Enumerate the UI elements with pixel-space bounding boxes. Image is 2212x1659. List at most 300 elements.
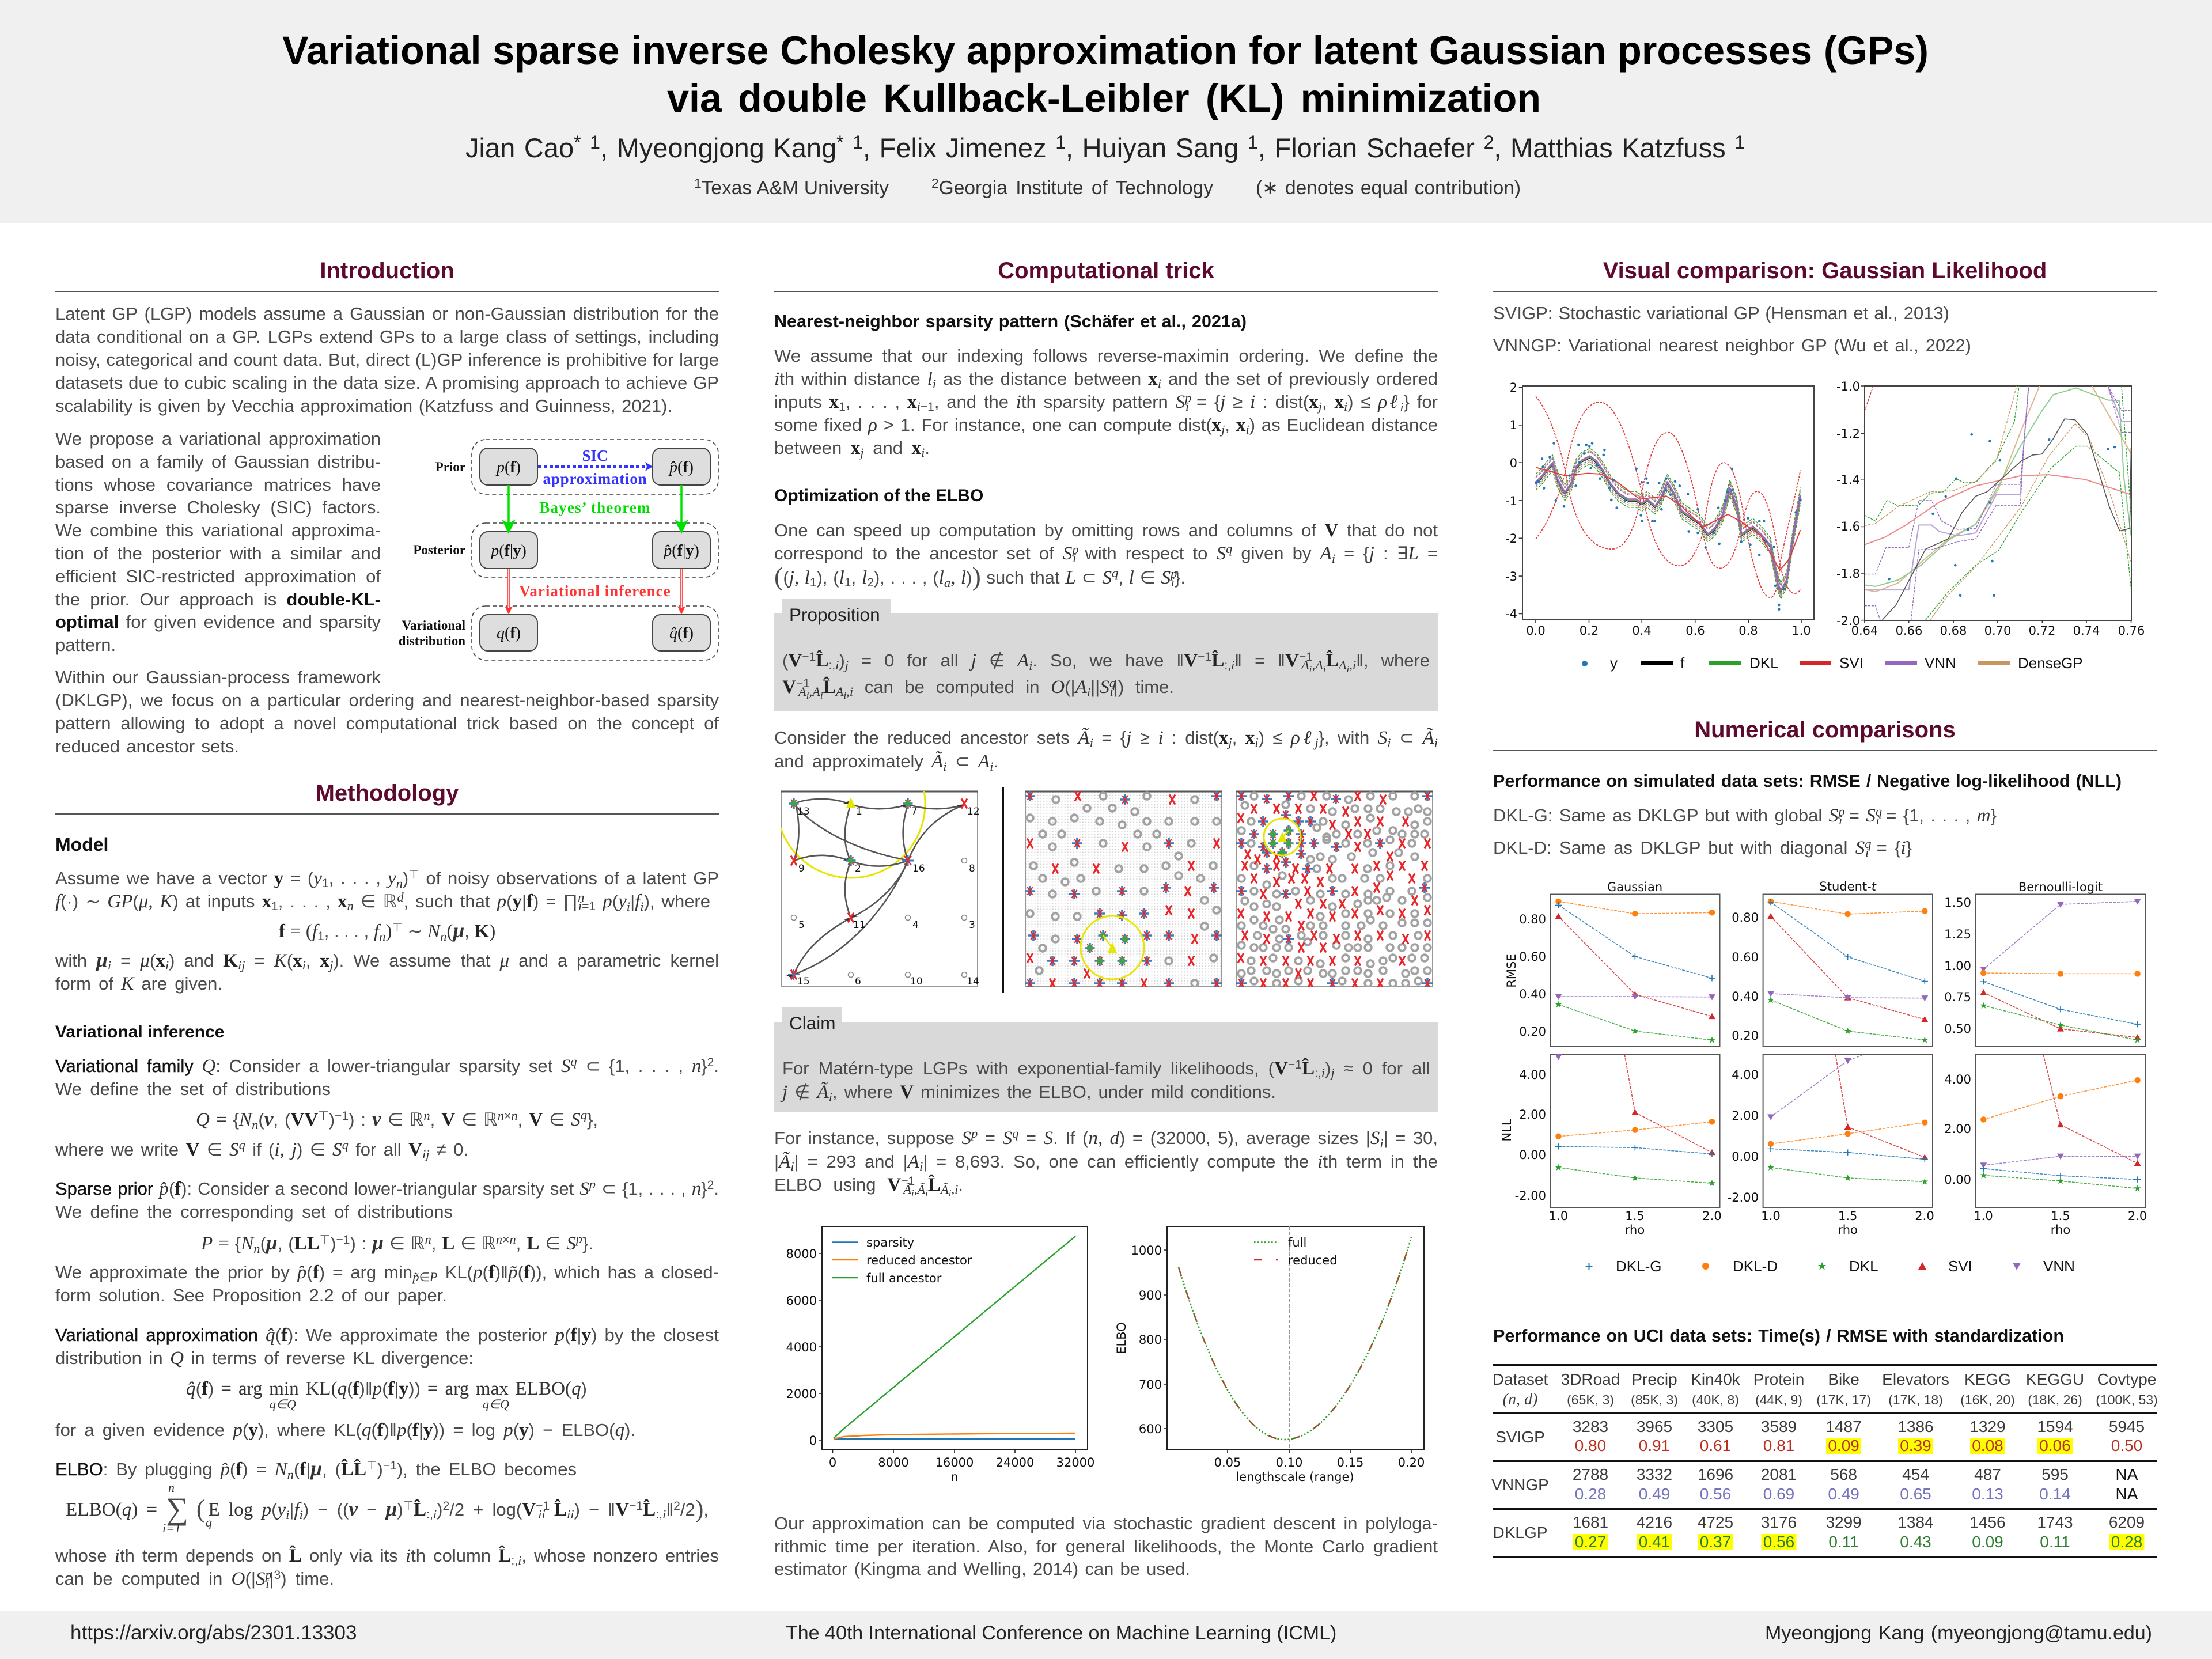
panel: visual comparison — [1493, 258, 2157, 672]
equation: double KL: q∈Q — [483, 1397, 509, 1411]
chart: Gaussian RMSE — [1505, 880, 1720, 1047]
line chart: zoomed domain: 0.70 — [1984, 624, 2011, 638]
line chart: ELBO vs lengthscale: 900 — [1139, 1289, 1162, 1302]
table: time and RMSE per dataset: 2081 — [1761, 1465, 1797, 1483]
header band — [0, 0, 2212, 223]
line chart: ELBO vs lengthscale: 800 — [1139, 1333, 1162, 1347]
subheading: model: Model — [55, 834, 108, 855]
legend: numerical comparisons — [1585, 1257, 2075, 1275]
graph: reverse maximin ordering: 13 — [797, 806, 810, 817]
chart: Bernoulli-logit RMSE — [1944, 880, 2145, 1047]
table: time and RMSE per dataset: NA — [2116, 1465, 2138, 1483]
text block: mean and kernel: with μi = μ(xi) and Kij = K(xi, xj). We assume that μ and a parametric kernel — [55, 948, 719, 972]
legend: visual comparison: VNN — [1925, 654, 1956, 672]
line chart: full domain: -2 — [1505, 532, 1517, 546]
table: time and RMSE per dataset: 1594 — [2037, 1418, 2073, 1435]
line chart: zoomed domain: -2.0 — [1836, 614, 1860, 628]
panel: methodology — [55, 781, 719, 1590]
text block: sparsity pattern: inputs x1, . . . , xi−1, and the ith sparsity pattern Spi = {j ≥ i : dist(xj, xi) ≤ ρℓi} for — [774, 391, 1438, 414]
table: time and RMSE per dataset: 0.49 — [1639, 1485, 1670, 1503]
text block: sparse prior: Sparse prior p̂(f): Consider a second lower-triangular sparsity set Sp ⊂ {1, . . . , n}2. — [55, 1177, 719, 1199]
text block: example sizes: |Ãi| = 293 and |Ai| = 8,693. So, one can efficiently compute the ith term in the — [774, 1151, 1438, 1173]
table: time and RMSE per dataset: 3305 — [1698, 1418, 1733, 1435]
table: time and RMSE per dataset: (17K, 18) — [1888, 1392, 1943, 1407]
line chart: full domain: 0.4 — [1632, 624, 1652, 638]
equation: ELBO sum: q — [206, 1515, 212, 1529]
chart: Bernoulli-logit NLL: 1.0 — [1974, 1209, 1993, 1223]
heading: computational trick — [774, 256, 1438, 292]
line chart: ELBO vs lengthscale: 0.20 — [1398, 1456, 1425, 1469]
text block: evidence relation: for a given evidence p(y), where KL(q(f)‖p(f|y)) = log p(y) − ELBO(q). — [55, 1419, 635, 1441]
text block: complexity: can be computed in O(|Spi|3) time. — [55, 1567, 334, 1590]
graph: reverse maximin ordering: 4 — [912, 919, 919, 931]
line chart: set sizes vs n: 0 — [829, 1456, 836, 1469]
text block: reduced ancestor sets: and approximately Ãi ⊂ Ai. — [774, 751, 998, 774]
chart: Gaussian NLL: 2.00 — [1519, 1108, 1546, 1122]
diagram: prior, posterior, variational distribution: p(f|y) — [490, 542, 527, 560]
subheading: sparsity pattern: Nearest-neighbor sparsity pattern (Schäfer et al., 2021a) — [774, 312, 1247, 331]
table: time and RMSE per dataset: 3589 — [1761, 1418, 1797, 1435]
heading: computational trick: Computational trick — [998, 258, 1214, 283]
graph: reverse maximin ordering: 7 — [911, 806, 918, 817]
line chart: ELBO vs lengthscale: 700 — [1139, 1378, 1162, 1392]
text block: variational family: We define the set of distributions — [55, 1079, 331, 1099]
table: time and RMSE per dataset: 568 — [1830, 1465, 1857, 1483]
line chart: ELBO vs lengthscale: full — [1288, 1236, 1306, 1249]
heading: visual comparison: Visual comparison: Gaussian Likelihood — [1603, 258, 2047, 283]
equation: double KL: q∈Q — [270, 1397, 296, 1411]
heading: visual comparison — [1493, 256, 2157, 292]
line chart: full domain: 0.6 — [1685, 624, 1705, 638]
text block: ELBO intro: ELBO: By plugging p̂(f) = Nn(f|μ, (L̂L̂⊤)−1), the ELBO becomes — [55, 1457, 577, 1482]
legend: numerical comparisons: DKL — [1849, 1257, 1878, 1275]
table: time and RMSE per dataset: 0.39 — [1900, 1437, 1931, 1455]
equation: double KL: q̂(f) = arg min KL(q(f)‖p(f|y)) = arg max ELBO(q) — [186, 1378, 587, 1399]
table: time and RMSE per dataset: (17K, 17) — [1816, 1392, 1871, 1407]
table: time and RMSE per dataset: 3283 — [1573, 1418, 1608, 1435]
table: time and RMSE per dataset: 0.11 — [2040, 1533, 2070, 1551]
table: time and RMSE per dataset: Protein — [1753, 1370, 1804, 1388]
table: time and RMSE per dataset: 0.11 — [1828, 1533, 1859, 1551]
line chart: set sizes vs n: n — [950, 1470, 959, 1484]
text block: complexity — [55, 1544, 719, 1590]
line chart: set sizes vs n: 8000 — [786, 1247, 817, 1261]
text block: model description: f(·) ∼ GP(μ, K) at inputs x1, . . . , xn ∈ ℝd, such that p(y|f) = ∏ni=1 p(yi|fi), where — [55, 890, 710, 914]
text block: reduced ancestor sets — [774, 726, 1438, 773]
line chart: full domain: 0.8 — [1738, 624, 1758, 638]
chart: Student-t NLL: 1.0 — [1761, 1209, 1781, 1223]
table: time and RMSE per dataset: DKLGP — [1493, 1524, 1547, 1541]
chart: Student-t NLL: 2.00 — [1732, 1109, 1759, 1123]
text block: optimization: ((j, l1), (l1, l2), . . . , (la, l)) such that L ⊂ Sq, l ∈ Spi}. — [774, 562, 1185, 591]
table: time and RMSE per dataset: 0.13 — [1972, 1485, 2003, 1503]
text block: model description: Assume we have a vector y = (y1, . . . , yn)⊤ of noisy observations of a latent GP — [55, 868, 719, 891]
line chart: set sizes vs n: reduced ancestor — [866, 1253, 972, 1267]
graph: reverse maximin ordering: 11 — [853, 919, 866, 931]
graph: reverse maximin ordering: 6 — [855, 976, 861, 987]
table: time and RMSE per dataset: 0.09 — [1972, 1533, 2003, 1551]
table: time and RMSE per dataset: 3176 — [1761, 1513, 1797, 1531]
line chart: zoomed domain: -1.4 — [1836, 473, 1860, 487]
line chart: full domain: 1 — [1510, 418, 1517, 432]
table: time and RMSE per dataset: 1696 — [1698, 1465, 1733, 1483]
graph: reverse maximin ordering: 16 — [912, 863, 925, 874]
line chart: ELBO vs lengthscale — [1115, 1226, 1425, 1484]
line chart: set sizes vs n: 4000 — [786, 1340, 817, 1354]
line chart: zoomed domain: -1.6 — [1836, 520, 1860, 533]
text block: optimization: correspond to the ancestor set of Spi with respect to Sq given by Ai = {j : ∃L = — [774, 541, 1438, 566]
table: time and RMSE per dataset: (40K, 8) — [1692, 1392, 1739, 1407]
diagram: prior, posterior, variational distribution: approximation — [543, 470, 647, 487]
table: time and RMSE per dataset: 3332 — [1637, 1465, 1672, 1483]
table: time and RMSE per dataset: KEGG — [1964, 1370, 2011, 1388]
text block: sparse prior: We define the corresponding set of distributions — [55, 1202, 453, 1222]
chart: Gaussian RMSE: 0.20 — [1519, 1025, 1546, 1039]
equation: ELBO sum: i=1 — [162, 1521, 181, 1535]
graph: reverse maximin ordering: 1 — [856, 806, 862, 817]
table: time and RMSE per dataset — [1493, 1359, 2157, 1561]
diagram: prior, posterior, variational distribution: q(f) — [497, 624, 521, 642]
text: VNNGP definition: VNNGP: Variational nearest neighbor GP (Wu et al., 2022) — [1493, 335, 1971, 355]
line chart: full domain: -4 — [1505, 607, 1517, 621]
table: time and RMSE per dataset: 0.28 — [1575, 1485, 1606, 1503]
chart: Gaussian NLL — [1500, 1054, 1722, 1237]
line chart: set sizes vs n: 8000 — [878, 1456, 909, 1469]
equation: ELBO sum: n — [168, 1480, 175, 1495]
table: time and RMSE per dataset: 0.28 — [2111, 1533, 2142, 1551]
chart: Gaussian RMSE: RMSE — [1505, 953, 1518, 988]
chart: Student-t NLL — [1728, 1054, 1934, 1237]
authors: Jian Cao* 1, Myeongjong Kang* 1, Felix Jimenez 1, Huiyan Sang 1, Florian Schaefer 2, Matthias Katzfuss 1 — [465, 132, 1745, 163]
footer band — [0, 1611, 2212, 1659]
graph: reverse maximin ordering: 15 — [797, 976, 810, 987]
table: time and RMSE per dataset: 487 — [1974, 1465, 2001, 1483]
text block: intro paragraph 1: Latent GP (LGP) models assume a Gaussian or non-Gaussian distribution for the — [55, 304, 719, 324]
proposition tab: Proposition — [789, 604, 880, 625]
chart: Bernoulli-logit NLL: 1.5 — [2051, 1209, 2070, 1223]
equation: double KL — [186, 1377, 587, 1415]
table: time and RMSE per dataset: 0.09 — [1828, 1437, 1859, 1455]
equation: ELBO sum: ELBO(q) = ∑ (E log p(yi|fi) − ((ν − μ)⊤L̂:,i)2/2 + log(V−1ii L̂ii) − ‖V−1L̂:,i‖2/2), — [66, 1491, 709, 1526]
table: time and RMSE per dataset: Covtype — [2097, 1370, 2156, 1388]
affiliations — [694, 176, 1521, 199]
equation: family Q: Q = {Nn(ν, (VV⊤)−1) : ν ∈ ℝn, V ∈ ℝn×n, V ∈ Sq}, — [196, 1107, 598, 1132]
line chart: zoomed domain: -1.0 — [1836, 380, 1860, 393]
line chart: set sizes vs n: sparsity — [866, 1236, 914, 1249]
table: time and RMSE per dataset: 1487 — [1825, 1418, 1862, 1435]
table: time and RMSE per dataset: VNNGP — [1491, 1476, 1549, 1494]
table: time and RMSE per dataset: 0.65 — [1900, 1485, 1931, 1503]
table: time and RMSE per dataset: Elevators — [1882, 1370, 1949, 1388]
text block: intro paragraph 3 — [55, 667, 719, 756]
line chart: ELBO vs lengthscale: 0.15 — [1337, 1456, 1363, 1469]
graph: reverse maximin ordering: 9 — [798, 863, 805, 874]
table: time and RMSE per dataset: 0.14 — [2039, 1485, 2071, 1503]
heading: numerical comparisons — [1493, 715, 2157, 751]
text block: example sizes: For instance, suppose Sp = Sq = S. If (n, d) = (32000, 5), average sizes |Si| = 30, — [774, 1126, 1438, 1150]
table: time and RMSE per dataset: 0.56 — [1700, 1485, 1731, 1503]
table: time and RMSE per dataset: (16K, 20) — [1960, 1392, 2015, 1407]
figure: ordering and neighbor sets — [781, 787, 1433, 993]
text block: stochastic gradient: estimator (Kingma and Welling, 2014) can be used. — [774, 1559, 1190, 1579]
chart: Student-t NLL: 4.00 — [1732, 1068, 1759, 1082]
text block: reduced ancestor sets: Consider the reduced ancestor sets Ãi = {j ≥ i : dist(xj, xi) ≤ ρℓj}, with Si ⊂ Ãi — [774, 727, 1438, 750]
line chart: ELBO vs lengthscale: 1000 — [1131, 1244, 1162, 1257]
text block: sparsity pattern: some fixed ρ > 1. For instance, one can compute dist(xj, xi) as Euclidean distance — [774, 414, 1438, 437]
affiliations: 2Georgia Institute of Technology — [931, 176, 1213, 199]
text block: sparsity pattern: ith within distance li as the distance between xi and the set of previously ordered — [774, 368, 1438, 391]
line chart: zoomed domain: -1.8 — [1836, 567, 1860, 581]
subheading: UCI data sets: Performance on UCI data sets: Time(s) / RMSE with standardization — [1493, 1326, 2064, 1346]
heading: methodology: Methodology — [316, 781, 459, 806]
affiliations: 1Texas A&M University — [694, 176, 889, 199]
table: time and RMSE per dataset: (85K, 3) — [1631, 1392, 1678, 1407]
legend: visual comparison: f — [1680, 654, 1685, 672]
text block: intro paragraph 2: tion of the posterior with a similar and — [55, 543, 381, 563]
line chart: ELBO vs lengthscale: 0.10 — [1276, 1456, 1302, 1469]
line chart: zoomed domain: 0.68 — [1940, 624, 1967, 638]
text block: intro paragraph 2: We propose a variational approximation — [55, 429, 381, 449]
chart: Bernoulli-logit NLL: 2.0 — [2128, 1209, 2147, 1223]
table: time and RMSE per dataset: 0.41 — [1639, 1533, 1670, 1551]
table: time and RMSE per dataset: 5945 — [2109, 1418, 2145, 1435]
text block: variational family — [55, 1054, 719, 1099]
text block: intro paragraph 2: We combine this variational approxima- — [55, 520, 381, 540]
graph: reverse maximin ordering: 10 — [910, 976, 923, 987]
table: time and RMSE per dataset: (n, d) — [1503, 1391, 1537, 1408]
panel: numerical comparisons — [1493, 709, 2157, 1285]
scatter: dense neighbor set — [1236, 791, 1433, 987]
line chart: set sizes vs n: 6000 — [786, 1294, 817, 1308]
chart: Bernoulli-logit RMSE: 1.00 — [1944, 959, 1971, 973]
text block: intro paragraph 2 — [55, 429, 381, 655]
text block: prior approximation: We approximate the prior by p̂(f) = arg minp̃∈P KL(p(f)‖p̃(f)), which has a closed- — [55, 1262, 719, 1284]
diagram: prior, posterior, variational distribution: Prior — [435, 460, 465, 474]
diagram: prior, posterior, variational distribution: p̂(f|y) — [662, 542, 699, 560]
table: time and RMSE per dataset: 1456 — [1969, 1513, 2006, 1531]
subheading: variational inference: Variational inference — [55, 1022, 224, 1041]
chart: Gaussian RMSE: 0.40 — [1519, 987, 1546, 1001]
panel: introduction — [55, 258, 719, 756]
legend: visual comparison: DKL — [1749, 654, 1779, 672]
chart: Bernoulli-logit NLL: rho — [2051, 1223, 2070, 1237]
text block: intro paragraph 3: pattern allowing to adopt a novel computational trick based on the concept of — [55, 713, 719, 733]
line chart: ELBO vs lengthscale: lengthscale (range) — [1236, 1470, 1354, 1484]
table: time and RMSE per dataset: 454 — [1902, 1465, 1929, 1483]
text block: mean and kernel — [55, 948, 719, 994]
diagram: prior, posterior, variational distribution: distribution — [399, 634, 465, 648]
chart: Student-t RMSE — [1732, 880, 1933, 1047]
chart: Gaussian NLL: 1.5 — [1625, 1209, 1645, 1223]
heading: introduction — [55, 256, 719, 292]
table: time and RMSE per dataset: (18K, 26) — [2028, 1392, 2082, 1407]
chart: Bernoulli-logit RMSE: 0.75 — [1944, 990, 1971, 1004]
table: time and RMSE per dataset: 0.50 — [2111, 1437, 2142, 1455]
chart: Gaussian NLL: 4.00 — [1519, 1068, 1546, 1082]
graph: reverse maximin ordering: 8 — [969, 863, 975, 874]
text block: sparsity pattern: We assume that our indexing follows reverse-maximin ordering. We define the — [774, 346, 1438, 366]
line chart: full domain: 0 — [1510, 456, 1517, 470]
chart: Gaussian NLL: rho — [1625, 1223, 1645, 1237]
claim box — [774, 1022, 1438, 1112]
panel: UCI performance table — [1493, 1319, 2157, 1561]
text: SVIGP definition: SVIGP: Stochastic variational GP (Hensman et al., 2013) — [1493, 303, 1949, 323]
diagram: prior, posterior, variational distribution: Posterior — [413, 543, 465, 557]
text block: stochastic gradient: rithmic time per iteration. Also, for general likelihoods, the Monte Carlo gradient — [774, 1536, 1438, 1556]
chart: Bernoulli-logit RMSE: Bernoulli-logit — [2018, 880, 2103, 894]
title: Variational sparse inverse Cholesky approximation for latent Gaussian processes (GPs) — [282, 29, 1929, 73]
line chart: ELBO vs lengthscale: ELBO — [1115, 1322, 1128, 1354]
line chart: set sizes vs n: 24000 — [996, 1456, 1034, 1469]
chart: Bernoulli-logit NLL: 4.00 — [1944, 1073, 1971, 1086]
table: time and RMSE per dataset: 1743 — [2037, 1513, 2073, 1531]
chart: Student-t NLL: -2.00 — [1728, 1191, 1759, 1205]
panel: computational trick — [774, 258, 1438, 1579]
table: time and RMSE per dataset: KEGGU — [2026, 1370, 2084, 1388]
text block: intro paragraph 2: tions whose covariance matrices have — [55, 475, 381, 495]
table: time and RMSE per dataset: 0.69 — [1763, 1485, 1794, 1503]
chart: Bernoulli-logit RMSE: 0.50 — [1944, 1022, 1971, 1036]
table: time and RMSE per dataset: 595 — [2041, 1465, 2069, 1483]
graph: reverse maximin ordering: 5 — [798, 919, 805, 931]
line chart: zoomed domain: 0.66 — [1896, 624, 1922, 638]
table: time and RMSE per dataset: 2788 — [1573, 1465, 1608, 1483]
proposition tab — [782, 599, 891, 622]
line chart: full domain — [1505, 381, 1814, 638]
text block: stochastic gradient — [774, 1512, 1438, 1581]
graph: reverse maximin ordering: 14 — [967, 976, 979, 987]
text block: optimization: One can speed up computation by omitting rows and columns of V that do not — [774, 520, 1438, 541]
table: time and RMSE per dataset: 0.49 — [1828, 1485, 1859, 1503]
diagram: prior, posterior, variational distribution: p(f) — [495, 459, 521, 476]
table: time and RMSE per dataset: 0.56 — [1763, 1533, 1794, 1551]
text block: example sizes: ELBO using V−1Ãi,ÃiL̂Ãi,i. — [774, 1174, 963, 1199]
table: time and RMSE per dataset: 0.37 — [1700, 1533, 1731, 1551]
line chart: set sizes vs n: 32000 — [1056, 1456, 1094, 1469]
chart: Gaussian NLL: NLL — [1500, 1119, 1514, 1142]
heading: methodology — [55, 779, 719, 815]
footer: paper link: https://arxiv.org/abs/2301.13303 — [70, 1622, 357, 1644]
line chart: set sizes vs n — [786, 1226, 1094, 1484]
diagram: prior, posterior, variational distribution: Bayes’ theorem — [539, 499, 651, 516]
line chart: set sizes vs n: 2000 — [786, 1387, 817, 1401]
heading: introduction: Introduction — [320, 258, 454, 283]
table: time and RMSE per dataset: (65K, 3) — [1567, 1392, 1614, 1407]
text block: intro paragraph 3: (DKLGP), we focus on a particular ordering and nearest-neighbor-based sparsity — [55, 690, 719, 710]
heading: numerical comparisons: Numerical comparisons — [1694, 717, 1956, 743]
text block: sparse prior — [55, 1177, 719, 1222]
table: time and RMSE per dataset: SVIGP — [1495, 1428, 1545, 1446]
legend: visual comparison — [1582, 654, 2083, 672]
text block: intro paragraph 2: optimal for given evidence and sparsity — [55, 612, 381, 632]
text block: intro paragraph 2: sparse inverse Cholesky (SIC) factors. — [55, 497, 381, 517]
subheading: optimization: Optimization of the ELBO — [774, 486, 983, 505]
proposition text: (V−1L̂:,i)j = 0 for all j ∉ Ai. So, we have ‖V−1L̂:,i‖ = ‖V−1Ai,AiL̂Ai,i‖, where — [782, 650, 1430, 675]
chart: Gaussian NLL: 2.0 — [1702, 1209, 1722, 1223]
footer: conference: The 40th International Conference on Machine Learning (ICML) — [786, 1622, 1336, 1644]
table: time and RMSE per dataset: 0.06 — [2039, 1437, 2071, 1455]
chart: Student-t NLL: 2.0 — [1915, 1209, 1934, 1223]
charts: ancestor size and ELBO — [789, 1215, 1440, 1492]
legend: visual comparison: y — [1610, 654, 1618, 672]
table: time and RMSE per dataset: 6209 — [2109, 1513, 2145, 1531]
diagram: prior, posterior, variational distribution: q̂(f) — [669, 624, 694, 642]
chart: Gaussian NLL: -2.00 — [1515, 1189, 1546, 1203]
line chart: full domain: 1.0 — [1791, 624, 1811, 638]
chart: Student-t RMSE: 0.20 — [1732, 1029, 1759, 1043]
line chart: set sizes vs n: 0 — [809, 1434, 817, 1448]
claim tab: Claim — [789, 1013, 836, 1033]
table: time and RMSE per dataset: 1329 — [1969, 1418, 2006, 1435]
diagram: prior, posterior, variational distribution: p̂(f) — [668, 459, 694, 476]
text block: intro paragraph 2: efficient SIC-restricted approximation of — [55, 566, 381, 586]
chart: Student-t NLL: 1.5 — [1838, 1209, 1857, 1223]
diagram: prior, posterior, variational distribution: Variational inference — [519, 582, 671, 600]
line chart: zoomed domain: 0.76 — [2118, 624, 2145, 638]
diagram: prior, posterior, variational distribution — [399, 439, 719, 661]
text block: variational approximation: Variational approximation q̂(f): We approximate the posterior p(f|y) by the closest — [55, 1324, 719, 1346]
callout: claim — [774, 1007, 1438, 1112]
text block: sparsity pattern: between xj and xi. — [774, 437, 930, 460]
graph: reverse maximin ordering: 12 — [967, 806, 980, 817]
text block: model description — [55, 868, 719, 914]
charts: gaussian likelihood fits — [1505, 380, 2145, 672]
chart: Gaussian RMSE: 0.80 — [1519, 912, 1546, 926]
scatter: sparse neighbor set — [1025, 791, 1222, 987]
chart: Gaussian RMSE: Gaussian — [1607, 880, 1662, 894]
diagram: prior, posterior, variational distribution: Variational — [402, 618, 465, 632]
footer: contact: Myeongjong Kang (myeongjong@tamu.edu) — [1765, 1622, 2152, 1644]
text block: intro paragraph 1: noisy, categorical and count data. But, direct (L)GP inference is prohibitive for large — [55, 350, 719, 370]
table: time and RMSE per dataset: 4725 — [1698, 1513, 1733, 1531]
chart: Student-t NLL: rho — [1838, 1223, 1858, 1237]
text block: mean and kernel: form of K are given. — [55, 973, 222, 994]
table: time and RMSE per dataset: 0.91 — [1639, 1437, 1670, 1455]
text block: intro paragraph 1: scalability is given by Vecchia approximation (Katzfuss and Guinness, 2021). — [55, 396, 672, 416]
table: time and RMSE per dataset: 1386 — [1897, 1418, 1934, 1435]
callout: proposition — [774, 599, 1438, 711]
text block: variational family: Variational family Q: Consider a lower-triangular sparsity set Sq ⊂ {1, . . . , n}2. — [55, 1054, 719, 1077]
proposition text — [782, 649, 1430, 699]
table: time and RMSE per dataset: 3DRoad — [1561, 1370, 1620, 1388]
line chart: set sizes vs n: 16000 — [935, 1456, 974, 1469]
text block: variational approximation — [55, 1324, 719, 1370]
chart: Bernoulli-logit RMSE: 1.25 — [1944, 927, 1971, 941]
text block: intro paragraph 2: based on a family of Gaussian distribu- — [55, 452, 381, 472]
text block: optimization — [774, 519, 1438, 589]
proposition box — [774, 613, 1438, 711]
table: time and RMSE per dataset: 0.81 — [1763, 1437, 1794, 1455]
chart: Bernoulli-logit NLL — [1944, 1054, 2147, 1237]
chart: Student-t RMSE: Student-t — [1819, 880, 1877, 893]
line chart: full domain: -1 — [1505, 494, 1517, 508]
claim text: j ∉ Ãi, where V minimizes the ELBO, under mild conditions. — [782, 1081, 1276, 1104]
table: time and RMSE per dataset: 0.80 — [1575, 1437, 1606, 1455]
equation: family P: P = {Nn(μ, (LL⊤)−1) : μ ∈ ℝn, L ∈ ℝn×n, L ∈ Sp}. — [201, 1231, 593, 1256]
line chart: full domain: -3 — [1505, 570, 1517, 584]
graph: reverse maximin ordering: 3 — [969, 919, 975, 931]
table: time and RMSE per dataset: Kin40k — [1691, 1370, 1741, 1388]
text block: intro paragraph 3: reduced ancestor sets. — [55, 736, 239, 756]
graph: reverse maximin ordering — [781, 790, 979, 987]
equation: ELBO sum — [66, 1481, 709, 1539]
line chart: zoomed domain — [1836, 380, 2145, 638]
text block: intro paragraph 1: data conditional on a GP. LGPs extend GPs to a large class of settings, including — [55, 327, 719, 347]
chart: Student-t NLL: 0.00 — [1732, 1150, 1759, 1164]
claim text — [782, 1056, 1430, 1104]
claim text: For Matérn-type LGPs with exponential-family likelihoods, (V−1L̂:,i)j ≈ 0 for all — [782, 1058, 1430, 1080]
text block: example sizes — [774, 1127, 1438, 1197]
